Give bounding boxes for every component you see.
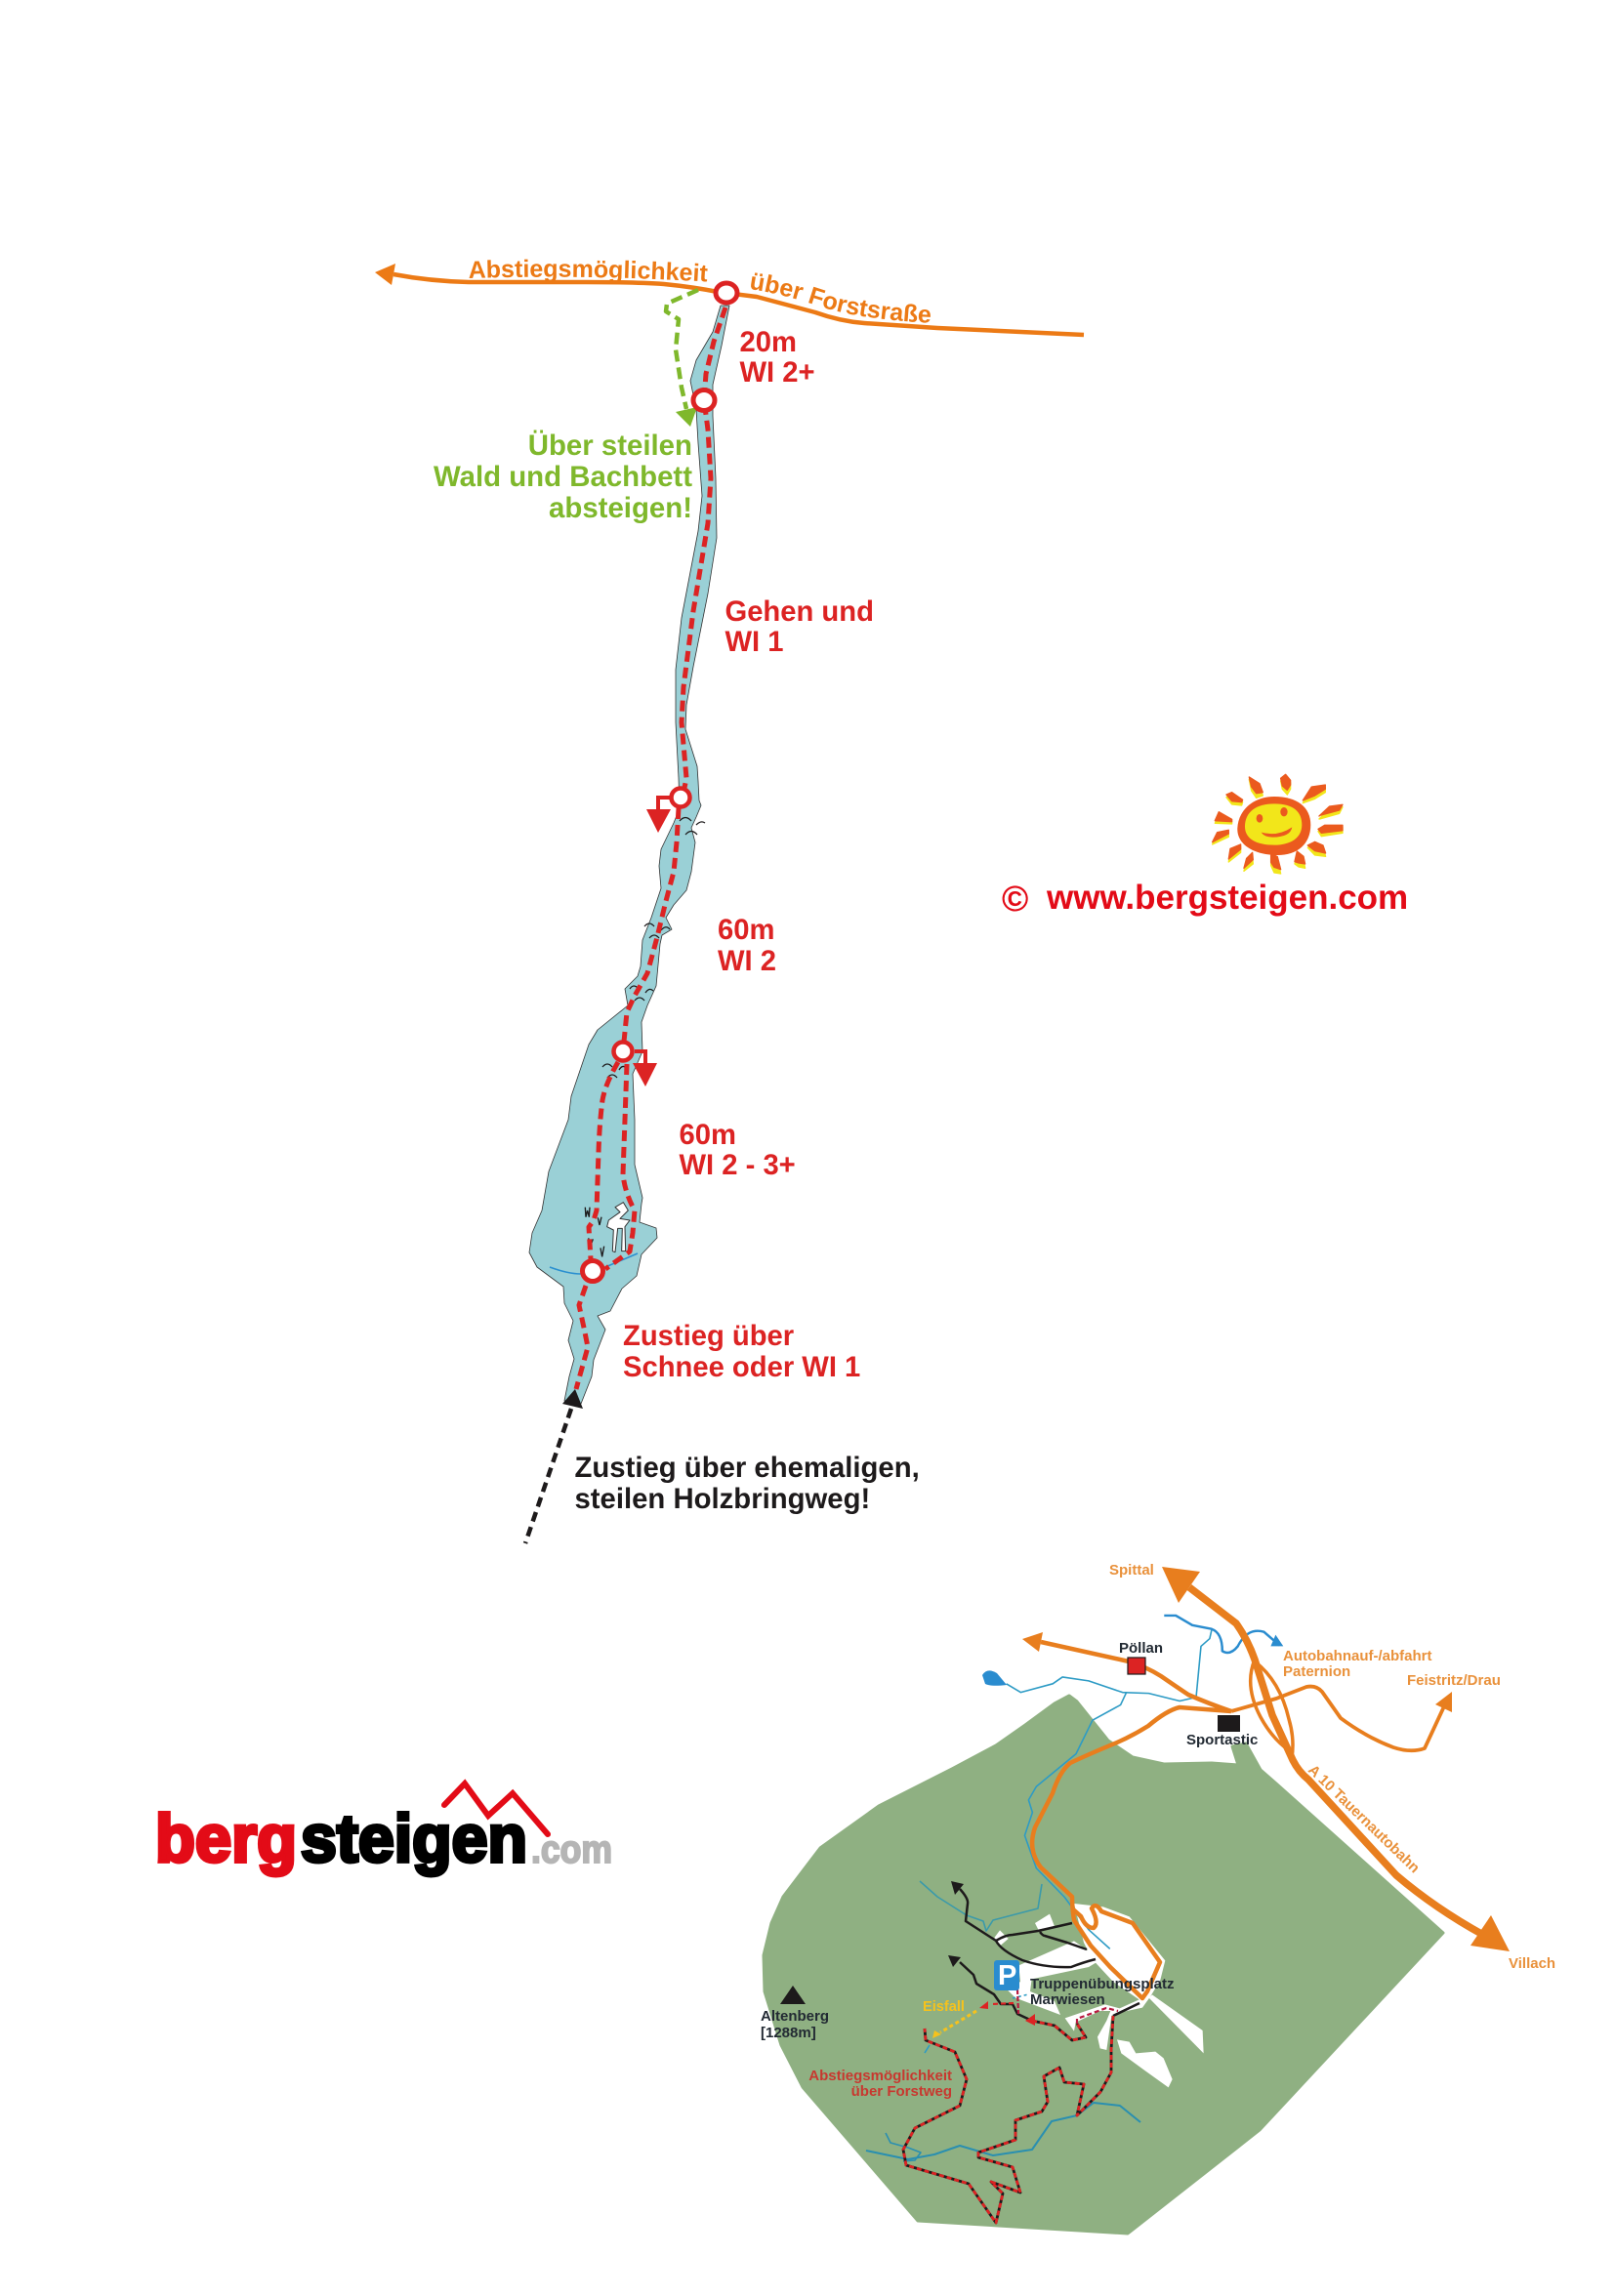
ice fall shape bbox=[529, 306, 729, 1404]
logo word black: steigen bbox=[301, 1801, 527, 1876]
approach label red: Schnee oder WI 1 bbox=[623, 1352, 860, 1383]
label: Truppenübungsplatz Marwiesen: Truppenübungsplatz bbox=[1030, 1976, 1174, 1992]
green descent label: Wald und Bachbett bbox=[434, 461, 692, 493]
approach label black: steilen Holzbringweg! bbox=[574, 1483, 870, 1515]
icon: lake bbox=[982, 1670, 1007, 1686]
red arrowheads bbox=[979, 2001, 1035, 2026]
sun rays bbox=[1213, 777, 1343, 874]
pitch label: 60m WI 2: WI 2 bbox=[718, 946, 776, 977]
label: A 10 Tauernautobahn: A 10 Tauernautobahn bbox=[1304, 1762, 1423, 1876]
blue river with arrow bbox=[1164, 1616, 1283, 1653]
label: Truppenübungsplatz Marwiesen: Marwiesen bbox=[1030, 1991, 1105, 2008]
pitch label: 20m: WI 2+ bbox=[740, 357, 815, 389]
yellow route to icefall bbox=[932, 2011, 976, 2038]
label: Autobahnauf-/abfahrt Paternion: Paternion bbox=[1283, 1663, 1350, 1680]
descent road: Abstiegsmöglichkeit über Forststraße bbox=[375, 260, 1084, 338]
label: Altenberg: [1288m] bbox=[761, 2025, 816, 2041]
label: Villach: Villach bbox=[1509, 1955, 1555, 1972]
belay station 5 bbox=[582, 1261, 603, 1281]
copyright and website: © bbox=[1002, 879, 1028, 919]
label: Spittal: Spittal bbox=[1109, 1562, 1154, 1578]
arrow Villach bbox=[1470, 1915, 1510, 1951]
pitch label: 20m: 20m bbox=[740, 327, 797, 358]
forest tracks black bbox=[960, 1889, 1139, 2021]
label: Sportastic: Sportastic bbox=[1186, 1732, 1258, 1748]
location map bbox=[761, 1562, 1555, 2234]
logo com gray: .com bbox=[531, 1828, 612, 1871]
rock features on ice bbox=[602, 818, 705, 1078]
pitch label: 60m WI 2 - 3+: WI 2 - 3+ bbox=[680, 1150, 796, 1181]
logo: bergsteigen.com bbox=[155, 1784, 612, 1876]
icon: Sportastic square bbox=[1218, 1715, 1240, 1732]
white rock figure bbox=[585, 1203, 630, 1256]
belay station 2 bbox=[693, 390, 715, 410]
logo word red: berg bbox=[155, 1801, 297, 1876]
label: Autobahnauf-/abfahrt Paternion: Autobahnauf-/abfahrt bbox=[1283, 1648, 1431, 1664]
red climbing route dashed bbox=[576, 308, 725, 1389]
green descent label: absteigen! bbox=[549, 492, 692, 524]
belay station 4 with rappel arrow bbox=[613, 1043, 657, 1086]
arrow Spittal bbox=[1162, 1567, 1200, 1603]
road to Feistritz bbox=[1231, 1687, 1452, 1750]
interchange loops bbox=[1251, 1660, 1293, 1758]
logo roof line bbox=[444, 1784, 548, 1834]
pitch label: 60m WI 2 - 3+: 60m bbox=[680, 1120, 736, 1151]
road label left: Abstiegsmöglichkeit bbox=[469, 260, 708, 281]
label: Feistritz/Drau: Feistritz/Drau bbox=[1407, 1672, 1501, 1689]
label: Pöllan: Pöllan bbox=[1119, 1640, 1163, 1657]
approach label black: Zustieg über ehemaligen, bbox=[574, 1452, 920, 1484]
road label right: über Forstsraße bbox=[751, 272, 931, 323]
copyright and website: www.bergsteigen.com bbox=[1046, 879, 1408, 917]
sun face bbox=[1237, 797, 1310, 855]
label: Eisfall: Eisfall bbox=[923, 1999, 965, 2015]
motorway A10 bbox=[1162, 1567, 1510, 1951]
road line with arrow bbox=[375, 264, 1084, 335]
icon: Pöllan square bbox=[1128, 1658, 1145, 1674]
approach label red: Zustieg über bbox=[623, 1321, 794, 1352]
icon: summit triangle bbox=[780, 1986, 806, 2004]
descent track black and red bbox=[903, 1989, 1118, 2223]
pitch label: Gehen und WI 1: Gehen und bbox=[725, 596, 874, 628]
track arrowheads bbox=[948, 1881, 964, 1967]
forest area bbox=[764, 1696, 1443, 2234]
pitch label: Gehen und WI 1: WI 1 bbox=[725, 627, 783, 658]
streams bbox=[866, 1630, 1212, 2161]
road to Pöllan bbox=[1022, 1632, 1231, 1711]
pitch label: 60m WI 2: 60m bbox=[718, 915, 774, 946]
label: Abstiegsmöglichkeit über Forstweg: Abstiegsmöglichkeit bbox=[808, 2068, 952, 2084]
icon: parking sign: P bbox=[998, 1960, 1016, 1991]
belay station 1 bbox=[716, 283, 737, 303]
label: Abstiegsmöglichkeit über Forstweg: über Forstweg bbox=[851, 2083, 952, 2100]
green descent label: Über steilen bbox=[528, 430, 692, 462]
label: Altenberg: Altenberg bbox=[761, 2008, 829, 2025]
thin blue stream on ice bbox=[550, 1253, 638, 1274]
icon: sun bbox=[1213, 774, 1343, 874]
white clearings bbox=[994, 1904, 1204, 2087]
green descent route bbox=[666, 290, 698, 427]
access road loop bbox=[1032, 1707, 1231, 1998]
belay station 3 with rappel arrow bbox=[646, 789, 689, 833]
approach arrow black dashed bbox=[525, 1389, 583, 1543]
